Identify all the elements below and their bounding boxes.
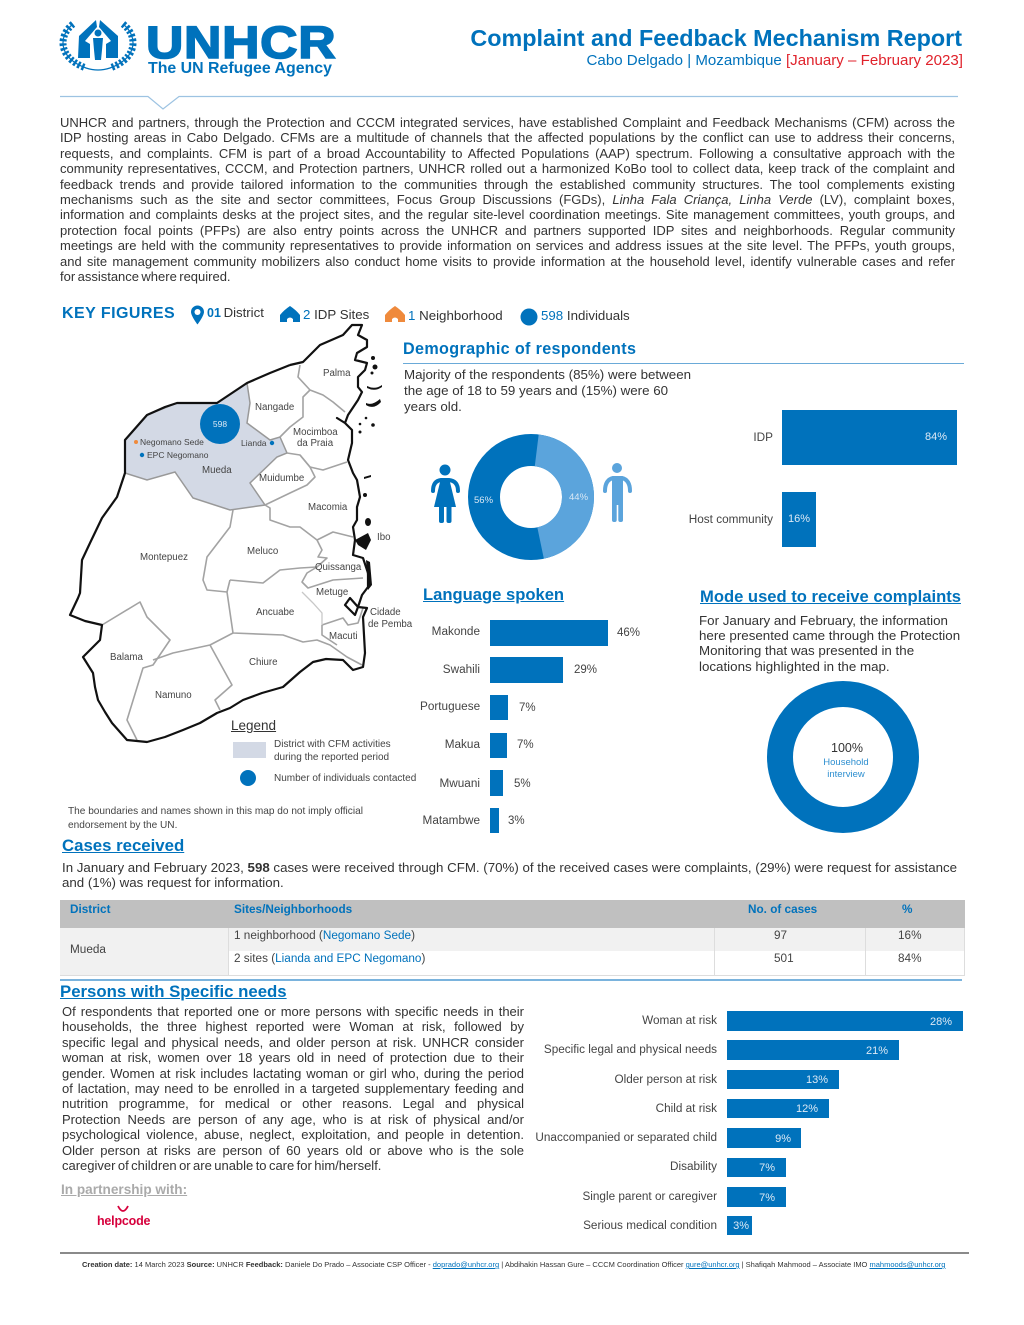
intro text: for assistance where required. — [60, 269, 231, 284]
light boundary: Metuge — [302, 592, 322, 625]
key figure: district — [191, 305, 264, 324]
donut: mode: 100% — [831, 741, 863, 755]
map labels: Montepuez — [140, 552, 188, 563]
demographic text: years old. — [404, 399, 462, 414]
row: unaccompanied or separated child: Unaccompanied or separated child — [535, 1131, 717, 1144]
row: single parent or caregiver: Single parent or caregiver — [582, 1190, 717, 1203]
label: 1 Neighborhood — [408, 308, 503, 323]
table header: % — [902, 903, 912, 916]
legend swatch: individuals — [240, 770, 256, 786]
map labels: Negomano Sede — [140, 437, 204, 447]
mode text: For January and February, the information — [699, 613, 948, 628]
row: Swahili: 29% — [574, 664, 597, 676]
footer text: Creation date: 14 March 2023 Source: UNHCR Feedback: Daniele Do Prado – Associate CSP Officer - doprado@unhcr.org | Abdihakin Hassan Gure – CCCM Coordination Officer gure@unhcr.org | Shafiqah Mahmood – Associate IMO mahmoods@unhcr.org — [82, 1260, 945, 1269]
row: older person at risk: Older person at risk — [614, 1073, 717, 1086]
map labels: Namuno — [155, 690, 192, 701]
bar chart: specific needs — [535, 1011, 963, 1235]
site markers — [134, 440, 274, 457]
donut labels: 44% — [569, 492, 589, 503]
intro text — [60, 115, 955, 284]
wordmark: UNHCR — [146, 17, 336, 68]
row: Makonde: Makonde — [432, 625, 480, 638]
key figure: IDP sites — [280, 306, 369, 322]
map labels: Chiure — [249, 657, 278, 668]
district boundaries — [102, 365, 363, 740]
label: IDP: IDP — [753, 431, 773, 444]
map labels: da Praia — [297, 438, 334, 449]
key figure: individuals — [520, 308, 630, 326]
row: single parent or caregiver — [530, 1187, 966, 1207]
header divider with notch — [60, 96, 958, 110]
map labels: Nangade — [255, 402, 294, 413]
row: woman at risk: 28% — [930, 1016, 952, 1028]
key figure: neighborhood — [385, 306, 503, 323]
table header — [60, 900, 965, 928]
table body: Mueda — [70, 943, 106, 956]
map labels: EPC Negomano — [147, 450, 209, 460]
row: child at risk: Child at risk — [656, 1102, 717, 1115]
legend text: district: District with CFM activities — [274, 739, 391, 750]
icon: orange tent — [385, 306, 405, 322]
demographic text: Majority of the respondents (85%) were between — [404, 367, 691, 382]
table header: No. of cases — [748, 903, 817, 916]
table body: 16% — [898, 929, 922, 942]
heading rule: demographic — [403, 363, 964, 364]
intro text: protection focal points (PFPs) are also entry points across the UNHCR and partners supported IDP sites and neighborhoods. Regular community — [60, 223, 955, 238]
row: older person at risk — [614, 1070, 839, 1089]
row: disability: Disability — [670, 1160, 717, 1173]
table body — [60, 928, 965, 976]
icon: UNHCR emblem — [60, 20, 136, 71]
specific needs text: specific legal and physical needs, and older person at risk. UNHCR consider — [62, 1035, 524, 1050]
cases text: and (1%) was request for information. — [62, 875, 284, 890]
row: Makua: 7% — [517, 739, 534, 751]
row: Swahili — [443, 657, 597, 683]
map: Cabo Delgado districts — [68, 324, 413, 744]
donut labels — [474, 492, 589, 506]
row: woman at risk: Woman at risk — [642, 1014, 717, 1027]
subtitle: Cabo Delgado | Mozambique [January – February 2023] — [587, 52, 963, 69]
row: Matambwe — [423, 808, 525, 833]
intro text: requests, and complaints. CFM is part of a broad Accountability to Affected Populations (AAP) spectrum. Following a consultative approach with the — [60, 146, 955, 161]
label: host community: Host community — [689, 513, 773, 526]
map labels: Lianda — [241, 438, 267, 448]
map disclaimer — [68, 806, 363, 830]
row: Portuguese: Portuguese — [420, 700, 480, 713]
intro text: and site management community mobilizers also conduct home visits to provide information at the household level, identify vulnerable cases and refer — [60, 254, 955, 269]
icon: blue dot — [520, 308, 538, 326]
map labels: Metuge — [316, 587, 348, 598]
cases text — [62, 860, 957, 890]
table body: 1 neighborhood (Negomano Sede) — [234, 929, 415, 942]
bar chart: residence status — [689, 410, 957, 547]
mode text — [699, 613, 960, 674]
tagline: The UN Refugee Agency — [148, 60, 332, 77]
specific needs text: caregiver of children or are unable to care for him/herself. — [62, 1158, 381, 1173]
intro text: mechanisms such as the site and sector committees, Focus Group Discussions (FGDs), Linha Fala Criança, Linha Verde (LV), complaint boxes, — [60, 192, 955, 207]
specific needs text: Of respondents that reported one or more persons with specific needs in their — [62, 1004, 524, 1019]
legend text: district — [274, 739, 391, 762]
donut: mode — [767, 681, 919, 833]
specific needs text: Older person at risks are person of 60 years old or above who is the sole — [62, 1143, 524, 1158]
row: serious medical condition: Serious medical condition — [583, 1219, 717, 1232]
row: child at risk — [530, 1099, 966, 1118]
divider — [60, 979, 962, 981]
bar: host community: 16% — [788, 513, 810, 525]
partnership label: In partnership with: — [61, 1182, 187, 1197]
map labels: Ibo — [377, 532, 390, 543]
specific needs text: of lactation, may need to be enrolled in a targeted supplementary feeding and — [62, 1081, 524, 1096]
table body: 97 — [774, 929, 787, 942]
legend swatch: district — [233, 742, 266, 758]
legend text: individuals: Number of individuals contacted — [274, 773, 416, 784]
specific needs text — [62, 1004, 524, 1173]
map labels: Muidumbe — [259, 473, 304, 484]
intro text: IDP hosting areas in Cabo Delgado. CFMs are a multitude of channels that the affected populations by the conflict can use to address their concerns, — [60, 130, 955, 145]
map labels: Quissanga — [315, 562, 362, 573]
logo: helpcode — [96, 1205, 150, 1231]
intro text: information and complaints desks at the project sites, and the regular site-level coordination meetings. Site management committees, youth groups, and — [60, 207, 955, 222]
map labels: Ancuabe — [256, 607, 294, 618]
row: disability: 7% — [759, 1162, 775, 1174]
table body: 501 — [774, 952, 794, 965]
row: serious medical condition — [530, 1216, 966, 1235]
intro text: community representatives, CCCM, and Protection partners, UNHCR rolled out a harmonized KoBo tool to collect data, keep track of the complaint and — [60, 161, 955, 176]
icon: woman — [433, 464, 458, 523]
row: serious medical condition: 3% — [733, 1220, 749, 1232]
logo: UNHCR — [60, 17, 336, 77]
row: Mwuani — [440, 770, 531, 796]
heading: mode: Mode used to receive complaints — [700, 587, 961, 606]
mode text: locations highlighted in the map. — [699, 659, 890, 674]
row: specific legal and physical needs: Specific legal and physical needs — [544, 1043, 717, 1056]
row: older person at risk: 13% — [806, 1074, 828, 1086]
legend title: Legend — [231, 718, 276, 733]
map labels: Mocimboa — [293, 427, 338, 438]
proportional circle: 598 — [200, 404, 240, 444]
row: Matambwe: Matambwe — [423, 814, 480, 827]
title: Complaint and Feedback Mechanism Report — [470, 25, 962, 51]
label: 2 IDP Sites — [303, 307, 369, 322]
mode text: Monitoring that was presented in the — [699, 643, 914, 658]
donut: gender — [431, 434, 632, 560]
row: Mwuani: Mwuani — [440, 777, 480, 790]
map disclaimer: The boundaries and names shown in this map do not imply official — [68, 806, 363, 817]
row: Portuguese: 7% — [519, 702, 536, 714]
table header: Sites/Neighborhoods — [234, 903, 352, 916]
row: Makonde: 46% — [617, 627, 640, 639]
table body: 84% — [898, 952, 922, 965]
donut: mode: interview — [827, 769, 865, 780]
map labels: Mueda — [202, 465, 232, 476]
heading: language: Language spoken — [423, 585, 564, 604]
map labels: Macuti — [329, 631, 358, 642]
footer rule — [60, 1252, 969, 1254]
map labels: de Pemba — [368, 619, 413, 630]
row: unaccompanied or separated child: 9% — [775, 1133, 791, 1145]
row: Swahili: Swahili — [443, 663, 480, 676]
icon: location pin — [191, 306, 204, 324]
specific needs text: households, the three highest reported were Woman at risk, followed by — [62, 1019, 524, 1034]
intro text: UNHCR and partners, through the Protection and CCCM integrated services, have established Complaint and Feedback Mechanisms (CFM) across the — [60, 115, 955, 130]
legend text: district: during the reported period — [274, 752, 389, 762]
highlighted district: Mueda — [125, 383, 287, 510]
intro text: feedback trends and provide tailored information to the communities through the established community structures. The tool complements existing — [60, 177, 955, 192]
donut segments — [479, 445, 583, 549]
icon: smile — [116, 1205, 130, 1214]
table: cases — [60, 900, 965, 976]
bar: host community — [782, 492, 816, 547]
specific needs text: nutrition programme, for medical or other reasons. Legal and physical — [62, 1096, 524, 1111]
bar: IDP: 84% — [925, 431, 947, 443]
bar chart: language — [420, 620, 640, 833]
row: single parent or caregiver: 7% — [759, 1192, 775, 1204]
heading: demographic: Demographic of respondents — [403, 340, 636, 358]
specific needs text: Protection Needs are person of any age, who is at risk of physical and/or — [62, 1112, 524, 1127]
map labels: Balama — [110, 652, 143, 663]
wordmark: helpcode — [97, 1214, 150, 1228]
row: Makua: Makua — [445, 738, 480, 751]
intro text: meetings are held with the community representatives to provide information on services and address issues at the site level. The PFPs, youth groups, — [60, 238, 955, 253]
row: specific legal and physical needs — [544, 1040, 899, 1060]
row: child at risk: 12% — [796, 1103, 818, 1115]
table body: 2 sites (Lianda and EPC Negomano) — [234, 952, 425, 965]
map labels: Macomia — [308, 502, 348, 513]
map labels: Cidade — [370, 607, 401, 618]
row: disability — [530, 1158, 966, 1177]
map legend — [231, 718, 416, 786]
table header: District — [70, 903, 110, 916]
province outline and coast — [70, 325, 368, 742]
specific needs text: gender. Women at risk includes lactating woman or girl who, during the period — [62, 1066, 524, 1081]
label: 01 District — [207, 305, 264, 320]
heading: cases: Cases received — [62, 836, 184, 855]
islands — [355, 356, 382, 590]
specific needs text: woman at risk, women over 18 years old in need of protection due to their — [62, 1050, 524, 1065]
row: specific legal and physical needs: 21% — [866, 1045, 888, 1057]
cases text: In January and February 2023, 598 cases were received through CFM. (70%) of the received cases were complaints, (29%) were request for assistance — [62, 860, 957, 875]
label: 598 Individuals — [541, 308, 630, 323]
row: Makonde — [432, 620, 640, 646]
donut: mode: Household — [823, 757, 869, 768]
mode text: here presented came through the Protection — [699, 628, 960, 643]
icon: blue tent — [280, 306, 300, 322]
demographic text: the age of 18 to 59 years and (15%) were 60 — [404, 383, 668, 398]
map labels: Meluco — [247, 546, 278, 557]
heading: specific needs: Persons with Specific needs — [60, 982, 287, 1001]
specific needs text: psychological violence, abuse, neglect, exploitation, and people in detention. — [62, 1127, 524, 1142]
demographic text — [404, 367, 691, 414]
map disclaimer: endorsement by the UN. — [68, 820, 177, 830]
row: Mwuani: 5% — [514, 778, 531, 790]
row: Makua — [445, 733, 534, 758]
row: unaccompanied or separated child — [530, 1128, 966, 1148]
map labels: Palma — [323, 368, 351, 379]
row: Portuguese — [420, 695, 536, 720]
icon: man — [605, 463, 630, 522]
proportional circle: 598: 598 — [213, 419, 227, 429]
row: woman at risk — [642, 1011, 963, 1031]
key figures heading: KEY FIGURES — [62, 305, 175, 322]
donut labels: 56% — [474, 495, 494, 506]
map labels — [110, 368, 413, 701]
bar: IDP — [782, 410, 957, 465]
row: Matambwe: 3% — [508, 815, 525, 827]
